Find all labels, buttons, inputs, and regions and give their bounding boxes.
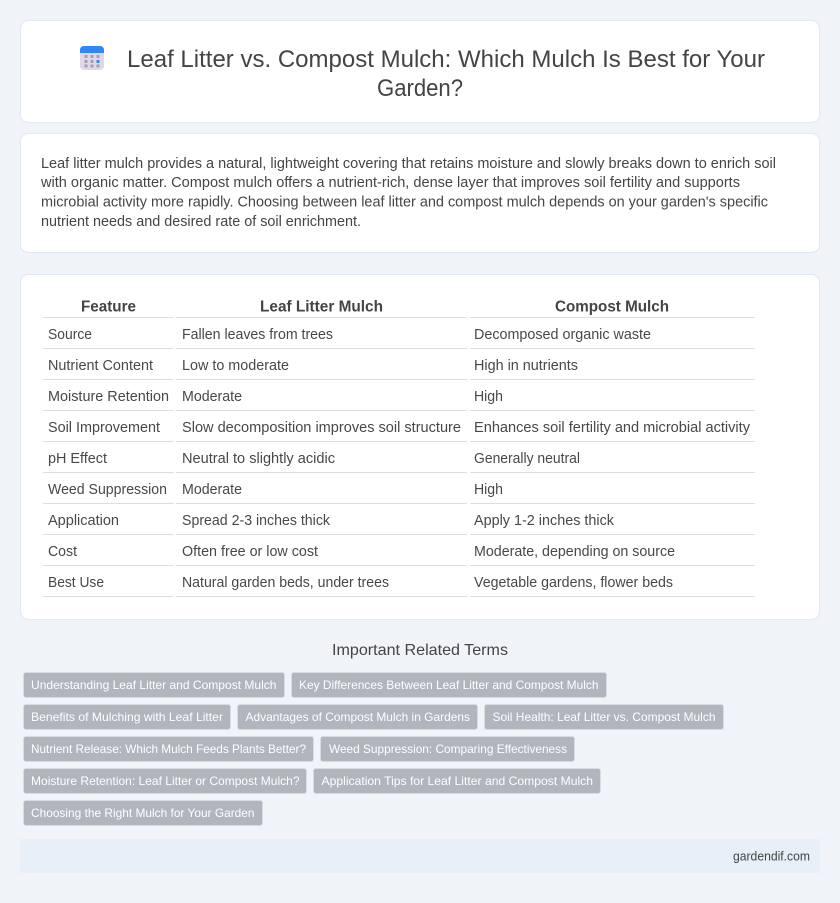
table row: pH effect: pH Effect (48, 451, 107, 467)
table row: pH effect (48, 451, 580, 467)
table row: weed suppression (48, 482, 503, 498)
table row: nutrient content: High in nutrients (474, 358, 578, 374)
table row: cost: Cost (48, 544, 77, 560)
icon: calendar (80, 46, 104, 70)
title (127, 46, 765, 102)
tag: Weed Suppression: Comparing Effectiveness (329, 742, 567, 756)
panel: header (20, 20, 820, 122)
table row: nutrient content (48, 358, 578, 374)
table row: cost: Often free or low cost (182, 544, 318, 560)
tag (24, 800, 262, 826)
tag (24, 672, 284, 698)
table row: soil improvement: Slow decomposition improves soil structure (182, 420, 461, 436)
table row: moisture retention: Moderate (182, 389, 242, 405)
table header: Leaf Litter Mulch (260, 298, 383, 316)
tag: Soil Health: Leaf Litter vs. Compost Mulch (492, 710, 716, 724)
table row: application: Application (48, 513, 119, 529)
table row: pH effect: Generally neutral (474, 451, 580, 467)
table row: source: Decomposed organic waste (474, 327, 651, 343)
table row: cost: Moderate, depending on source (474, 544, 675, 560)
table header (81, 298, 669, 316)
table row: source: Fallen leaves from trees (182, 327, 333, 343)
table row: soil improvement (48, 420, 751, 436)
table row: moisture retention: High (474, 389, 503, 405)
table row: application: Spread 2-3 inches thick (182, 513, 331, 529)
table row: source: Source (48, 327, 92, 343)
tag: Moisture Retention: Leaf Litter or Compost Mulch? (31, 774, 300, 788)
heading: important related terms: Important Related Terms (332, 642, 508, 659)
tag: Application Tips for Leaf Litter and Compost Mulch (322, 774, 593, 788)
table header: Compost Mulch (555, 298, 669, 316)
footer: gardendif.com (733, 850, 810, 864)
table row: cost (48, 544, 675, 560)
table row: weed suppression: Weed Suppression (48, 482, 167, 498)
panel: comparison table (20, 274, 820, 620)
table row: pH effect: Neutral to slightly acidic (182, 451, 335, 467)
table row: weed suppression: Moderate (182, 482, 242, 498)
panel: introduction (20, 134, 820, 252)
tag (314, 768, 600, 794)
title: Leaf Litter vs. Compost Mulch: Which Mulch Is Best for Your (127, 46, 765, 73)
text block: introduction paragraph: Leaf litter mulch provides a natural, lightweight covering that retains moisture and slowly breaks down to enrich soil (41, 156, 776, 172)
tag (484, 704, 724, 730)
tag: Understanding Leaf Litter and Compost Mulch (31, 678, 276, 692)
table row: moisture retention (48, 389, 503, 405)
tag: Benefits of Mulching with Leaf Litter (31, 710, 223, 724)
tag (24, 704, 230, 730)
table row: best use: Best Use (48, 575, 104, 591)
tag (24, 768, 306, 794)
text block: introduction paragraph: nutrient needs and desired rate of soil enrichment. (41, 214, 361, 230)
tag (24, 736, 314, 762)
table row: source (48, 327, 651, 343)
table header: Feature (81, 298, 136, 316)
title: Garden? (377, 75, 463, 102)
tag (238, 704, 478, 730)
table row: best use: Natural garden beds, under trees (182, 575, 389, 591)
footer (20, 839, 820, 873)
tag: Advantages of Compost Mulch in Gardens (246, 710, 470, 724)
text block: introduction paragraph (40, 156, 776, 230)
table row: application (48, 513, 615, 529)
text block: introduction paragraph: microbial activity more rapidly. Choosing between leaf litter and compost mulch depends on your garden's specific (41, 194, 768, 210)
table row: weed suppression: High (474, 482, 503, 498)
tag: Nutrient Release: Which Mulch Feeds Plants Better? (31, 742, 306, 756)
table row: best use: Vegetable gardens, flower beds (474, 575, 673, 591)
text block: introduction paragraph: with organic matter. Compost mulch offers a nutrient-rich, dense layer that improves soil fertility and supports (40, 175, 740, 191)
tag: Choosing the Right Mulch for Your Garden (31, 806, 254, 820)
table row: soil improvement: Enhances soil fertility and microbial activity (474, 420, 751, 436)
table row: nutrient content: Low to moderate (182, 358, 289, 374)
tag (320, 736, 574, 762)
table row: application: Apply 1-2 inches thick (474, 513, 615, 529)
tag (292, 672, 606, 698)
related term tags (24, 672, 724, 826)
tag: Key Differences Between Leaf Litter and Compost Mulch (299, 678, 598, 692)
table row: best use (48, 575, 673, 591)
table row: nutrient content: Nutrient Content (48, 358, 153, 374)
table row: soil improvement: Soil Improvement (48, 420, 160, 436)
table row: moisture retention: Moisture Retention (48, 389, 169, 405)
